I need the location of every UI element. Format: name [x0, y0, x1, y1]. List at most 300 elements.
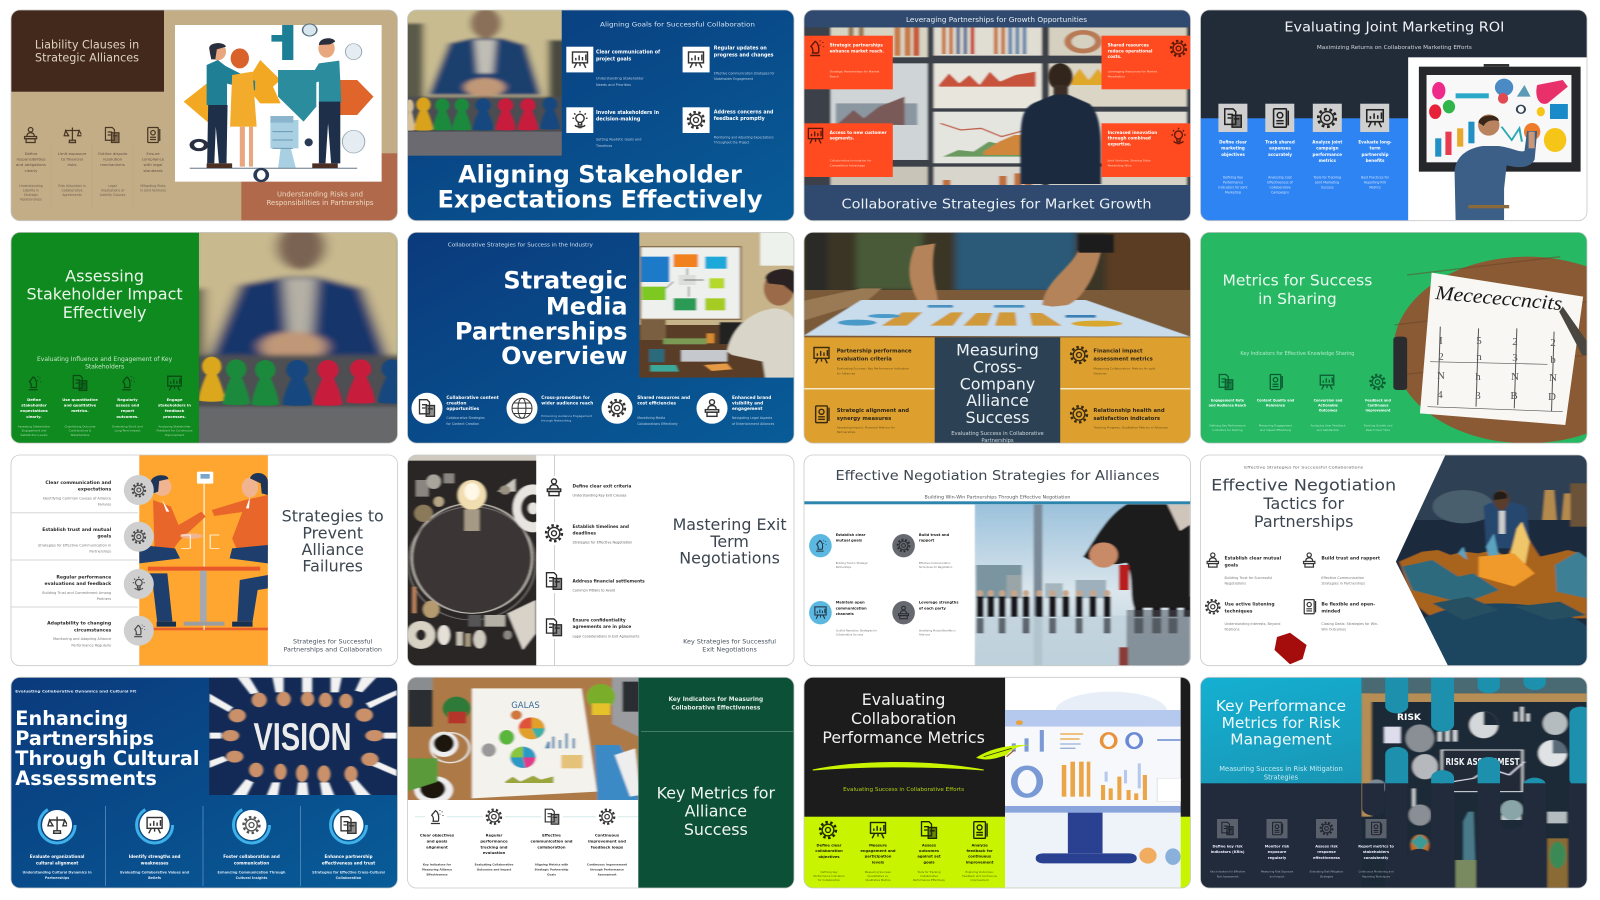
labels on board	[1397, 713, 1520, 768]
item 1: Define clear	[817, 843, 842, 847]
callout 2: reduce operational	[1108, 48, 1153, 53]
heading: Stakeholder Impact	[27, 285, 183, 304]
item 2	[1304, 553, 1381, 586]
panel: Aligning Stakeholder Expectations Effectively	[398, 3, 794, 221]
teal and navy rounded slot mask	[1362, 672, 1592, 892]
item 1: Engagement Rate	[1211, 399, 1245, 403]
title: Evaluating Joint Marketing ROI	[1284, 21, 1504, 36]
heading: Alliance	[301, 540, 364, 559]
icon row and captions: to financial	[61, 157, 83, 162]
icon row and captions: Understanding	[19, 184, 43, 188]
subtitle: Key Strategies for Successful	[683, 637, 776, 645]
item 1: Clear communication and	[45, 480, 111, 486]
panel: Measuring Cross-Company Alliance Success	[800, 228, 1198, 444]
item 4: Continuous	[595, 833, 620, 838]
item 3	[913, 822, 945, 882]
item 4	[587, 807, 628, 877]
title: Media	[546, 292, 628, 320]
heading: Prevent	[302, 523, 363, 542]
item 1: Effectiveness	[427, 873, 448, 877]
callout 1	[804, 36, 893, 89]
item 1	[23, 807, 92, 880]
item 1: Understanding Key Exit Clauses	[572, 493, 627, 497]
item 1: for Alliances	[837, 371, 856, 375]
item 1	[809, 533, 868, 569]
subtitle: Exit Negotiations	[702, 645, 758, 653]
subtitle: Understanding Risks and	[277, 191, 363, 199]
icon row and captions: compliance	[142, 157, 165, 162]
step 4: benefits	[1366, 158, 1385, 163]
panel: Effective Negotiation Strategies for Alliances	[804, 455, 1191, 666]
item 1: and Audience Reach	[1209, 404, 1247, 408]
item 1: Negotiations	[1224, 582, 1246, 586]
item 3: outcomes	[919, 849, 940, 853]
step 4: Reporting ROI	[1364, 180, 1386, 184]
item 4	[892, 601, 958, 637]
photo: handwritten notepad on wood: b	[1550, 354, 1556, 366]
item 1: goals	[1224, 562, 1238, 568]
item 2: Build trust and	[919, 533, 950, 537]
item 4	[962, 822, 998, 882]
icon row and captions: Implications of	[101, 188, 125, 192]
item 3: Shared resources and	[637, 395, 690, 401]
item 4: Monitoring and Adapting Alliance	[53, 637, 111, 641]
item 4: Adaptability to changing	[47, 621, 111, 627]
photo: man viewing dashboards	[800, 27, 1198, 187]
panel: Mastering Exit Term Negotiations	[403, 453, 794, 667]
step 2: Collaborative	[1269, 185, 1291, 189]
item 2: Effective Communication	[919, 561, 951, 565]
center title block: Cross-	[973, 358, 1022, 376]
icon row and captions: clearly	[25, 168, 38, 173]
item 3: Conversion and	[1314, 399, 1343, 403]
heading: Strategic Alliances	[35, 52, 139, 65]
photo: blurred man with coloured pawns	[408, 10, 562, 156]
callout 1: Strategic Partnerships for Market	[830, 70, 880, 74]
item 2: wider audience reach	[541, 400, 593, 406]
item 4: continuous	[968, 855, 992, 859]
step 2: Campaigns	[1271, 190, 1289, 194]
item 2: goals	[97, 534, 111, 540]
item 1: Building Trust in Strategic	[836, 561, 868, 565]
icon row and captions: in Joint Ventures	[140, 188, 166, 192]
item 2: Build trust and rapport	[1321, 556, 1381, 562]
item 3: communication and	[530, 838, 573, 844]
title: Partnerships	[455, 317, 628, 345]
item 4: Improvement	[971, 878, 989, 882]
item 2: Evaluating Collaborative	[475, 863, 513, 867]
subtitle: Evaluating Collaborative Dynamics and Cultural Fit	[15, 689, 136, 694]
item 4	[1363, 375, 1393, 432]
center title block	[935, 337, 1060, 444]
item 1: mutual goals	[836, 539, 862, 543]
item 4: Tracking Progress: Qualitative Metrics in Alliances	[1092, 426, 1168, 430]
item 2: Strategic alignment and	[837, 408, 909, 414]
item 3: Actionable	[1318, 404, 1339, 408]
item 4: Continuous Monitoring and	[1358, 870, 1394, 874]
illustration: business people at table	[139, 455, 268, 666]
item 4	[543, 616, 640, 639]
item 2: progress and changes	[714, 53, 774, 59]
center title block: Measuring	[956, 341, 1039, 360]
heading: Term	[709, 532, 749, 551]
item 1: Key Indicators for Effective	[1210, 870, 1245, 874]
photo: handwritten notepad on wood: n	[1476, 351, 1482, 363]
item 2: Quantifying Outcome	[65, 424, 96, 428]
item 3: Regularly	[117, 397, 138, 402]
item 1: Measuring Alliance	[422, 868, 452, 872]
item 2: performance	[480, 838, 508, 844]
item 2	[38, 522, 154, 554]
step 4: Evaluate long-	[1358, 139, 1392, 144]
callout 4: Joint Ventures: Sharing Risks	[1107, 159, 1151, 163]
callout 1: Reach	[830, 75, 839, 79]
item 3: outcomes.	[116, 414, 139, 419]
heading: Effective Negotiation	[1211, 476, 1396, 495]
photo: handwritten notepad on wood: 2	[1438, 351, 1444, 363]
item 4: satisfaction indicators	[1093, 416, 1160, 422]
panel: Evaluating Collaboration Performance Metrics	[804, 677, 1190, 888]
icon row and captions: Agreements	[62, 193, 82, 197]
item 2: Techniques for Negotiation	[919, 565, 953, 569]
step 4: term	[1369, 146, 1381, 151]
subtitle: Stakeholders	[85, 364, 124, 371]
item 4: Reporting Techniques	[1362, 874, 1391, 878]
item 1: Identifying Common Causes of Alliance	[43, 496, 111, 500]
item 2	[683, 46, 775, 81]
item 3: Performance Effectively	[913, 878, 945, 882]
item 1: Evaluating Success: Key Performance Indicators	[837, 367, 909, 371]
item 4: Tracking Growth and	[1363, 423, 1393, 427]
step 1: Marketing	[1225, 190, 1241, 194]
icon row and captions: Ensure	[146, 151, 160, 156]
subtitle: Measuring Success in Risk Mitigation	[1219, 765, 1343, 773]
item 4: Closing Deals: Strategies for Win-	[1321, 622, 1379, 626]
callout 3: Access to new customer	[830, 130, 888, 135]
callout 2: Shared resources	[1108, 43, 1149, 48]
item 1	[1207, 553, 1282, 586]
subtitle: Aligning Goals for Successful Collaboration	[600, 22, 755, 29]
item 4: Identifying Mutual Benefits in	[919, 629, 956, 633]
photo: handwritten notepad on wood: N	[1549, 372, 1557, 384]
item 3	[543, 570, 645, 593]
title: Collaborative Strategies for Market Growth	[842, 196, 1152, 212]
item 4: feedback promptly	[714, 116, 766, 122]
item 4: Navigating Legal Aspects	[732, 416, 773, 420]
item 2: Relevance	[1266, 404, 1286, 408]
title: Key Performance	[1216, 697, 1346, 715]
item 4: Continuous	[1367, 404, 1389, 408]
title: Effective Negotiation Strategies for Alliances	[836, 468, 1160, 484]
icon row and captions: Liability in	[23, 188, 39, 192]
item 2: tracking and	[480, 844, 508, 849]
item 2: Effective Communication	[1321, 576, 1364, 580]
item 3: Collaborative Success	[836, 633, 864, 637]
subtitle: Building Win-Win Partnerships Through Effective Negotiation	[924, 495, 1071, 501]
item 1	[1209, 374, 1247, 432]
item 3: Setting Realistic Goals and	[596, 137, 641, 141]
photo: hand placing red piece over figures	[974, 504, 1191, 666]
item 4: Improvement	[1366, 409, 1391, 413]
item 2: Measuring Success:	[865, 870, 891, 874]
item 4	[683, 107, 774, 144]
panel: Enhancing Partnerships Through Cultural Assessments	[11, 677, 398, 888]
step 1: Defining Key	[1223, 175, 1243, 179]
item 2: Strategies for Effective Negotiation	[572, 541, 632, 545]
item 1: Needs and Priorities	[596, 83, 631, 87]
step 2: Analyzing Cost	[1268, 175, 1293, 179]
item 1: stakeholder	[21, 403, 47, 408]
item 3	[530, 807, 573, 877]
item 1	[1210, 819, 1245, 878]
panel: Collaborative Strategies for Market Growth	[800, 10, 1198, 221]
heading: Strategies to	[282, 506, 384, 525]
item 3: Collaborations Effectively	[637, 422, 678, 426]
item 2: Strategies for Effective Communication in	[38, 544, 111, 548]
step 3: Success	[1321, 185, 1334, 189]
item 1: Define	[27, 397, 41, 402]
title: Management	[1230, 730, 1332, 748]
item 3	[602, 393, 690, 426]
item 2: Assessing Impact: Financial Metrics for	[837, 426, 896, 430]
icon row and captions: risks	[68, 162, 76, 167]
step 3: Tools for Tracking	[1313, 175, 1341, 179]
subtitle: Strategies	[1264, 773, 1299, 781]
panel: Effective Negotiation Tactics for Partnerships	[1200, 453, 1596, 683]
item 2	[1261, 819, 1294, 878]
item 1: Defining Key Performance	[1209, 423, 1246, 427]
step 1: Define clear	[1219, 139, 1247, 144]
item 4: Ensure confidentiality	[572, 617, 626, 623]
item 1: opportunities	[446, 406, 480, 412]
step 4: Metrics	[1369, 185, 1381, 189]
item 2: Measuring Risk Exposure	[1261, 870, 1294, 874]
item 3: Building Trust and Commitment Among	[42, 591, 111, 595]
item 4: Leverage strengths	[919, 601, 958, 605]
callout 1: Strategic partnerships	[830, 43, 883, 48]
icon row and captions: resolution	[103, 157, 123, 162]
item 2	[62, 376, 98, 437]
item 2	[120, 807, 190, 880]
item 4: through Performance	[590, 868, 624, 872]
item 1: objectives	[818, 855, 840, 859]
title: Performance Metrics	[822, 728, 985, 747]
callout 3: Collaborative Innovation for	[830, 159, 872, 163]
item 3	[809, 601, 878, 637]
center title block: Success	[966, 408, 1029, 427]
item 2: exposure	[1268, 850, 1287, 854]
item 3: Involve stakeholders in	[596, 110, 660, 116]
photo: GALAS chart paper on desk	[403, 675, 643, 804]
item 1: expectations	[78, 487, 111, 493]
item 2: Quantitative vs.	[867, 874, 889, 878]
item 4: Performance Regularly	[71, 644, 111, 648]
item 3: Understanding Interests, Beyond	[1224, 622, 1280, 626]
panel: Metrics for Success in Sharing	[1200, 232, 1600, 443]
item 1: cultural alignment	[36, 860, 78, 865]
icon row and captions: Liability Clauses	[100, 193, 126, 197]
item 2: Beliefs	[148, 876, 161, 880]
item 3: Collaborative	[920, 874, 938, 878]
item 4: minded	[1321, 608, 1340, 614]
item 1	[43, 475, 154, 506]
panel: Assessing Stakeholder Impact Effectively	[11, 223, 408, 448]
item 3: Ventures	[1093, 371, 1107, 375]
step 3: campaign	[1316, 146, 1339, 151]
item 4: feedback loops	[591, 844, 624, 849]
title: Enhancing	[15, 707, 128, 730]
item 4: improvement	[966, 860, 994, 864]
illustration: man at whiteboard	[1408, 57, 1587, 221]
step 3: Analyze joint	[1312, 139, 1342, 144]
item 1: Indicators for Sharing	[1212, 428, 1243, 432]
item 1	[813, 822, 845, 882]
subtitle: Maximizing Returns on Collaborative Marketing Efforts	[1317, 45, 1472, 51]
callout 2: costs.	[1108, 54, 1122, 59]
photo: handwritten notepad on wood: I	[1439, 335, 1443, 347]
title: Alliance	[685, 802, 747, 821]
item 3: Monetizing Media	[637, 416, 665, 420]
step 2: accurately	[1268, 152, 1292, 157]
photo: handwritten notepad on wood: 2	[1550, 337, 1556, 349]
item 1: Building Trust for Successful	[1224, 576, 1272, 580]
item 1	[18, 376, 51, 437]
item 2: regularly	[1268, 856, 1287, 860]
item 2	[1257, 374, 1295, 432]
item 1	[412, 393, 499, 426]
item 3: Financial impact	[1093, 349, 1143, 355]
item 3: Long-Term Impact	[115, 429, 141, 433]
item 4: Be flexible and open-	[1321, 601, 1375, 607]
item 4: stakeholders in	[158, 403, 191, 408]
divider line	[554, 455, 556, 666]
item 2: Measure	[869, 843, 887, 847]
item 3: Regular performance	[56, 574, 111, 580]
item 2	[475, 807, 513, 872]
icon row and captions: Mitigating Risks	[140, 184, 166, 188]
item 1: creation	[446, 400, 466, 406]
item 3: Analyzing User Feedback	[1310, 423, 1346, 427]
step 4	[1358, 104, 1392, 189]
item 2: levels	[872, 860, 885, 864]
title: Strategic	[503, 266, 628, 294]
photo: handwritten notepad on wood: Mecececcncits	[1433, 282, 1563, 315]
step 4: Best Practices for	[1361, 175, 1390, 179]
item 1: Clear communication of	[596, 49, 661, 55]
title: Collaboration	[851, 709, 956, 728]
panel: Strategic Media Partnerships Overview	[408, 232, 796, 443]
title: Aligning Stakeholder	[458, 161, 742, 189]
step 2: expenses	[1269, 146, 1291, 151]
step 3: performance	[1313, 152, 1342, 157]
icon row and captions: Legal	[108, 184, 117, 188]
item 3: evaluations and feedback	[45, 581, 112, 587]
photo: light bulb and gears on dark board	[403, 453, 554, 667]
labels on board: RISK	[1397, 713, 1422, 723]
item 1: Failures	[98, 502, 111, 506]
item 4: Feedback and Continuous	[962, 874, 998, 878]
photo: handwritten notepad on wood: D	[1548, 391, 1556, 403]
item 2: Establish trust and mutual	[42, 527, 112, 533]
icon row and captions: Collaborative	[61, 188, 83, 192]
item 3: Positions	[1224, 628, 1240, 632]
item 4: Collaboration	[336, 876, 362, 880]
item 4: Assessment	[598, 873, 617, 877]
step 1	[1218, 104, 1248, 194]
illustration: monitor dashboard	[813, 677, 1181, 888]
item 4: processes.	[163, 414, 186, 419]
item 3: Tools for Tracking	[916, 870, 941, 874]
item 3: Common Pitfalls to Avoid	[572, 588, 615, 592]
callout 2: Leveraging Resources for Market	[1108, 70, 1158, 74]
center title block: Partnerships	[981, 438, 1014, 444]
item 2: weaknesses	[141, 860, 169, 865]
step 3: metrics	[1319, 158, 1336, 163]
photo: handwritten notepad on wood: 4	[1437, 389, 1443, 401]
item 4: effectiveness and trust	[322, 860, 375, 865]
heading top: Collaborative Effectiveness	[671, 705, 761, 711]
item 4: Address concerns and	[714, 109, 774, 115]
item 2	[860, 822, 896, 882]
item 3	[218, 807, 286, 880]
item 2: Partnerships	[89, 550, 111, 554]
icon row and captions: and obligations	[16, 162, 46, 167]
item 2: evaluation	[483, 850, 506, 855]
photo: handwritten notepad on wood: N	[1437, 370, 1445, 382]
callout 4: Increased innovation	[1108, 130, 1157, 135]
item 4: Report metrics to	[1358, 844, 1394, 848]
item 4: Legal Considerations in Exit Agreements	[572, 634, 640, 638]
item 1: Satisfaction Levels	[20, 433, 48, 437]
item 4: consistently	[1364, 856, 1389, 860]
item 4: improvement and	[588, 838, 626, 844]
illustration: partners shaking hands	[175, 24, 382, 182]
item 2: engagement and	[860, 849, 896, 853]
item 1	[543, 476, 631, 499]
item 1: Partnerships	[836, 565, 852, 569]
heading: Effectively	[63, 303, 146, 322]
icon row and captions: standards	[143, 168, 163, 173]
panel: Evaluating Joint Marketing ROI	[1200, 10, 1587, 221]
item 2: Monitor risk	[1265, 844, 1290, 848]
text: VISION: VISION	[254, 716, 352, 759]
step 2: Track shared	[1265, 139, 1295, 144]
item 3: Foster collaboration and	[223, 854, 280, 859]
item 1: Partnership performance	[837, 349, 912, 355]
icon row and captions: Risk Allocation in	[58, 184, 86, 188]
icon row and captions: Outline dispute	[98, 151, 128, 156]
item 4: Reach Over Time	[1366, 428, 1390, 432]
item 2: Measuring Engagement	[1259, 423, 1293, 427]
item 3: Measuring Collaboration: Metrics for gold	[1093, 367, 1155, 371]
photo: handwritten notepad on wood: 3	[1475, 390, 1481, 402]
item 4: Analyze	[971, 843, 988, 847]
item 4	[1358, 819, 1394, 878]
item 2: and Impact	[1270, 874, 1284, 878]
item 4	[696, 393, 775, 426]
callout 2	[1102, 36, 1190, 89]
item 3: Evaluating Risk Mitigation	[1310, 870, 1344, 874]
callout 3	[804, 123, 893, 177]
item 2: Enhancing Audience Engagement	[541, 414, 593, 418]
step 3: Joint Marketing	[1314, 180, 1339, 184]
item 1: collaboration	[815, 849, 843, 853]
callout 2: Penetration	[1108, 75, 1125, 79]
decorative red hexagon	[1274, 633, 1307, 664]
heading: Metrics for Success	[1222, 272, 1372, 290]
item 3	[1206, 600, 1280, 632]
item 3: report	[121, 408, 134, 413]
